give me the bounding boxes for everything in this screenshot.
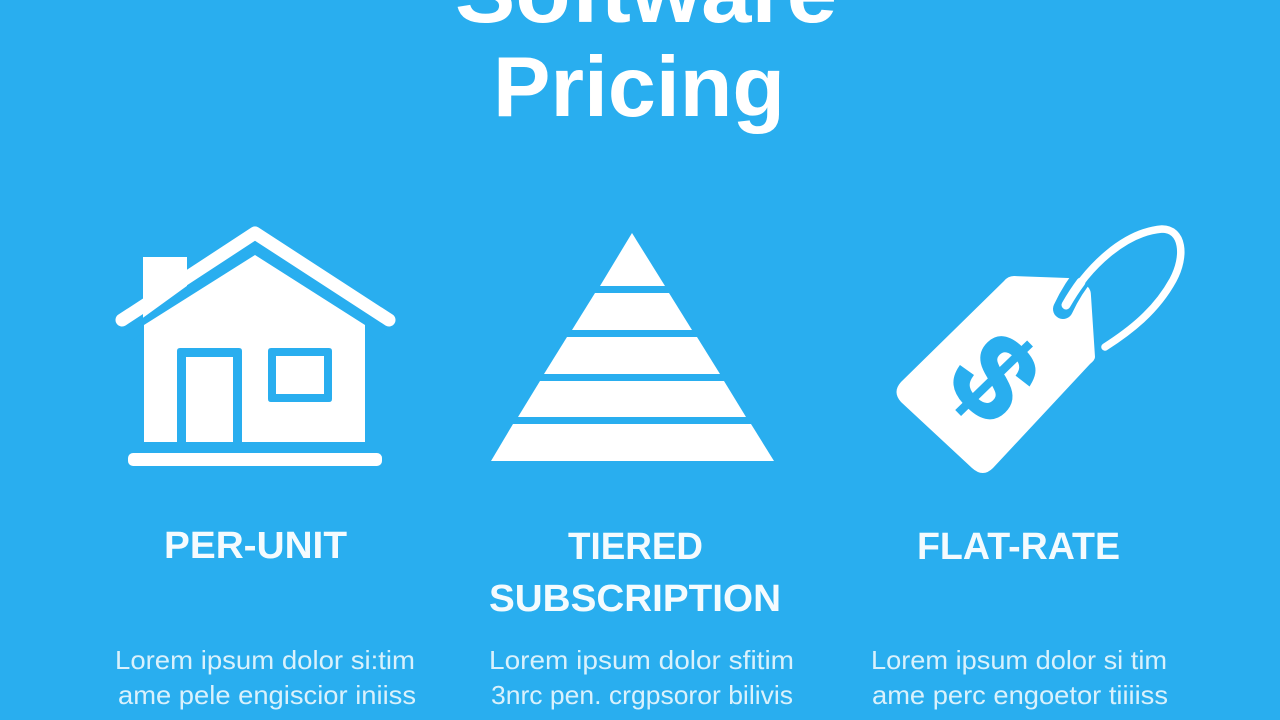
heading: per-unit: PER-UNIT bbox=[164, 525, 347, 567]
heading: flat-rate: FLAT-RATE bbox=[917, 526, 1120, 568]
text block: tiered subscription description bbox=[489, 645, 794, 720]
text block: flat-rate description: ame perc engoetor tiiiiss bbox=[872, 680, 1168, 710]
panel: flat-rate bbox=[871, 229, 1181, 720]
text block: per-unit description: ame pele engiscior iniiss bbox=[118, 680, 416, 710]
title bbox=[455, 0, 837, 135]
heading: tiered subscription: TIERED bbox=[568, 526, 703, 568]
text block: flat-rate description: Lorem ipsum dolor si tim bbox=[871, 645, 1167, 675]
heading: tiered subscription: SUBSCRIPTION bbox=[489, 578, 781, 620]
text block: tiered subscription description: Lorem ipsum dolor sfitim bbox=[489, 645, 794, 675]
icon: price tag bbox=[896, 229, 1181, 473]
icon: dollar sign: $ bbox=[923, 307, 1066, 448]
title: Pricing bbox=[493, 40, 785, 135]
heading: tiered subscription bbox=[489, 526, 781, 620]
icon: pyramid bbox=[491, 233, 774, 461]
text block: tiered subscription description: 3nrc pen. crgpsoror bilivis bbox=[491, 680, 793, 710]
panel: per-unit bbox=[115, 233, 416, 720]
text block: per-unit description bbox=[115, 645, 416, 720]
panel: tiered subscription bbox=[489, 233, 794, 720]
icon: house bbox=[122, 233, 389, 466]
text block: flat-rate description bbox=[871, 645, 1168, 720]
text block: per-unit description: Lorem ipsum dolor si:tim bbox=[115, 645, 415, 675]
